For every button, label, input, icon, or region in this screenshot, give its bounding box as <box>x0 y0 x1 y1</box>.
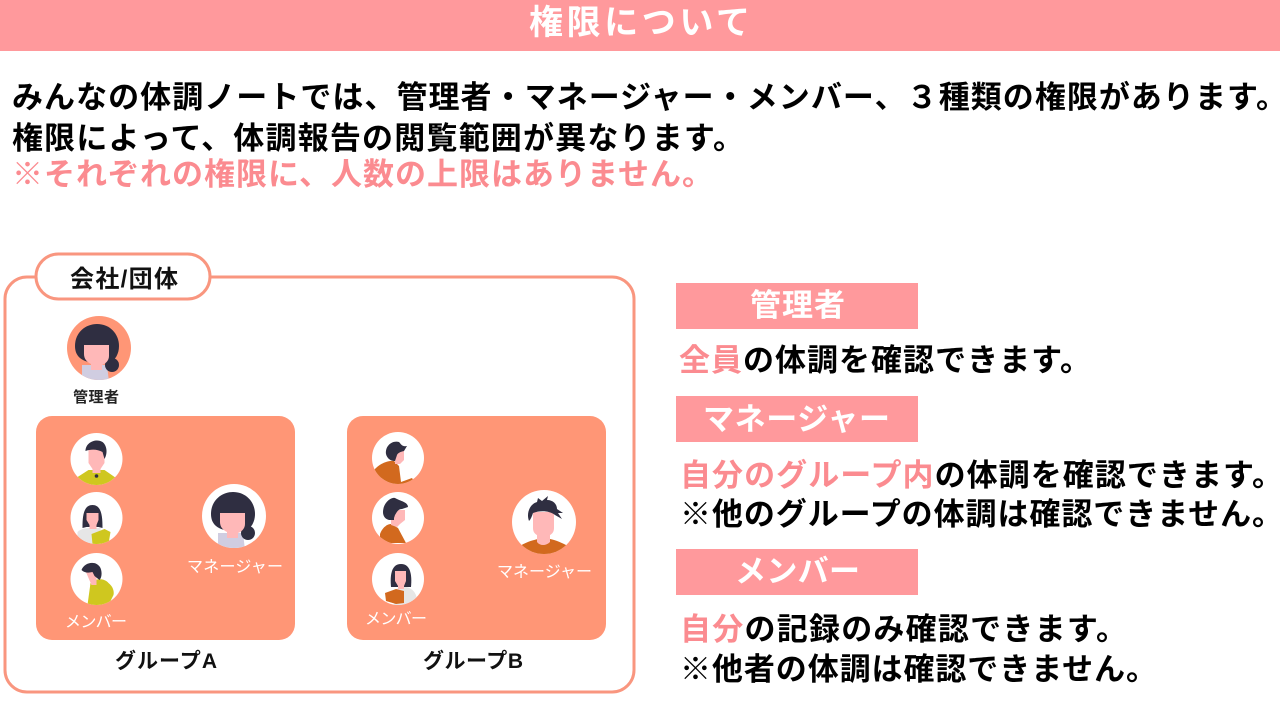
member description <box>680 612 1157 687</box>
icon: member avatar 2 <box>70 492 122 544</box>
panel: group A <box>36 416 295 640</box>
member heading <box>676 549 918 595</box>
manager heading <box>676 396 918 442</box>
manager description: 自分のグループ内の体調を確認できます。 <box>680 458 1280 493</box>
panel: manager role <box>676 396 1280 532</box>
group A caption: グループA <box>115 649 217 673</box>
member description: ※他者の体調は確認できません。 <box>680 652 1157 687</box>
manager heading: マネージャー <box>703 402 890 437</box>
icon: member avatar 4 <box>372 432 424 488</box>
icon: administrator avatar <box>67 316 131 382</box>
administrator description: 全員の体調を確認できます。 <box>679 343 1091 378</box>
title banner: 権限について <box>529 4 750 42</box>
panel: organisation diagram <box>5 254 634 692</box>
icon: manager avatar <box>202 484 266 550</box>
icon: member avatar 1 <box>70 433 122 489</box>
company label pill: 会社/団体 <box>70 266 178 293</box>
manager description: ※他のグループの体調は確認できません。 <box>680 497 1280 532</box>
administrator heading: 管理者 <box>750 288 845 323</box>
intro text: 権限によって、体調報告の閲覧範囲が異なります。 <box>12 121 744 156</box>
company label pill <box>36 254 210 299</box>
icon: member avatar 3 <box>70 553 122 605</box>
intro text: みんなの体調ノートでは、管理者・マネージャー・メンバー、３種類の権限があります。 <box>12 80 1280 115</box>
administrator label: 管理者 <box>73 388 119 406</box>
title banner <box>0 0 1280 51</box>
manager label: マネージャー <box>187 558 283 576</box>
icon: member avatar 5 <box>372 492 424 544</box>
intro text <box>12 80 1280 192</box>
icon: member avatar 6 <box>372 553 424 605</box>
member label: メンバー <box>65 614 127 631</box>
icon: manager avatar <box>512 490 576 556</box>
administrator heading <box>676 283 918 329</box>
panel: administrator role <box>676 283 1091 378</box>
member heading: メンバー <box>735 554 860 589</box>
member label: メンバー <box>365 611 427 628</box>
intro text: ※それぞれの権限に、人数の上限はありません。 <box>12 157 713 192</box>
manager description <box>680 458 1280 532</box>
group B caption: グループB <box>423 649 523 673</box>
manager label: マネージャー <box>497 563 592 581</box>
member description: 自分の記録のみ確認できます。 <box>680 612 1127 647</box>
panel: member role <box>676 549 1157 687</box>
panel: group B <box>347 416 606 640</box>
